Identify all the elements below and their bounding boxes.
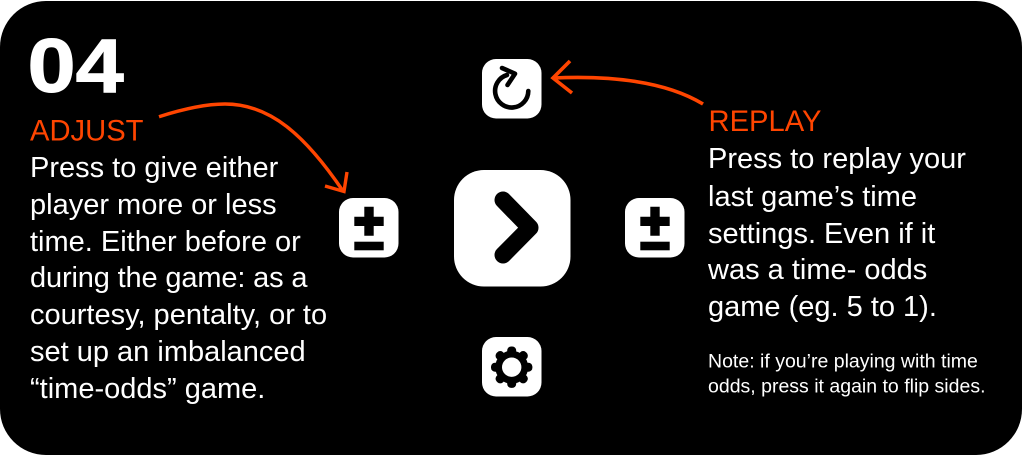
icon: settings button	[482, 337, 542, 396]
icon: left plus-minus button	[339, 198, 398, 258]
adjust description: courtesy, pentalty, or to	[30, 299, 327, 331]
icon: right plus-minus button	[625, 198, 684, 258]
adjust description: “time-odds” game.	[30, 373, 265, 405]
step number: 04	[28, 24, 124, 109]
heading: replay: REPLAY	[708, 106, 822, 138]
arrow: replay to replay button	[553, 61, 703, 104]
adjust description: Press to give either	[30, 152, 279, 184]
panel: replay text	[707, 106, 986, 398]
arrow: adjust to plus-minus button	[159, 104, 347, 192]
replay description: was a time- odds	[707, 254, 927, 286]
icon: centre start button	[454, 170, 570, 286]
replay description: settings. Even if it	[708, 218, 935, 250]
replay note: odds, press it again to flip sides.	[708, 376, 986, 398]
replay description: last game’s time	[708, 181, 917, 213]
icon: replay button	[482, 59, 542, 118]
adjust description: time. Either before or	[30, 226, 301, 258]
replay description: Press to replay your	[708, 143, 966, 175]
adjust description: set up an imbalanced	[30, 336, 306, 368]
adjust description: player more or less	[30, 189, 277, 221]
panel: adjust text	[30, 116, 335, 405]
replay note: Note: if you’re playing with time	[708, 350, 978, 372]
gear glyph	[491, 346, 532, 388]
replay description: game (eg. 5 to 1).	[708, 291, 937, 323]
heading: adjust: ADJUST	[30, 116, 144, 148]
adjust description: during the game: as a	[30, 262, 308, 294]
